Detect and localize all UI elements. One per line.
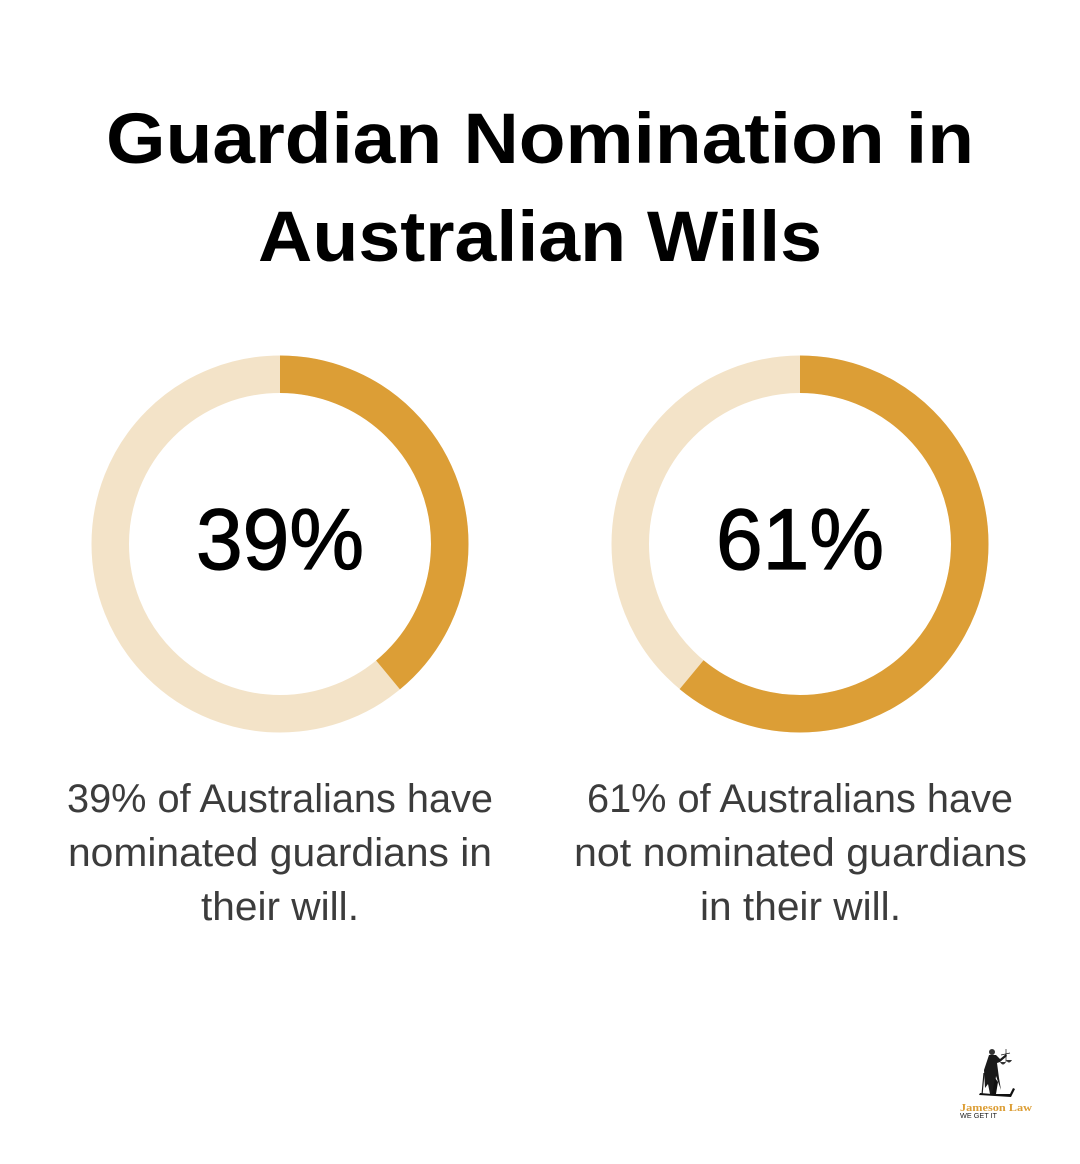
value: 61%: 61% [716,492,884,588]
panel: 61 percent not nominated [574,374,1027,929]
description: 39%: 39% of Australians have [67,777,493,821]
panel: 39 percent nominated [67,374,493,929]
icon: lady justice [979,1049,1015,1097]
description: 61%: not nominated guardians [574,831,1027,875]
description: 39%: their will. [201,885,359,929]
logo tagline: WE GET IT [960,1111,997,1120]
title: Australian Wills [258,198,822,277]
donut chart: 39% [110,374,450,714]
value: 39%: 39% [196,492,364,588]
description: 39%: nominated guardians in [68,831,492,875]
description: 61%: in their will. [700,885,901,929]
description: 61%: 61% of Australians have [587,777,1013,821]
donut chart: 61% [630,374,970,714]
description: 61% [574,777,1027,929]
logo wordmark: Jameson Law [960,1102,1032,1114]
title: Guardian Nomination in [106,100,974,179]
description: 39% [67,777,493,929]
title [106,100,974,277]
logo: Jameson Law [960,1049,1032,1120]
